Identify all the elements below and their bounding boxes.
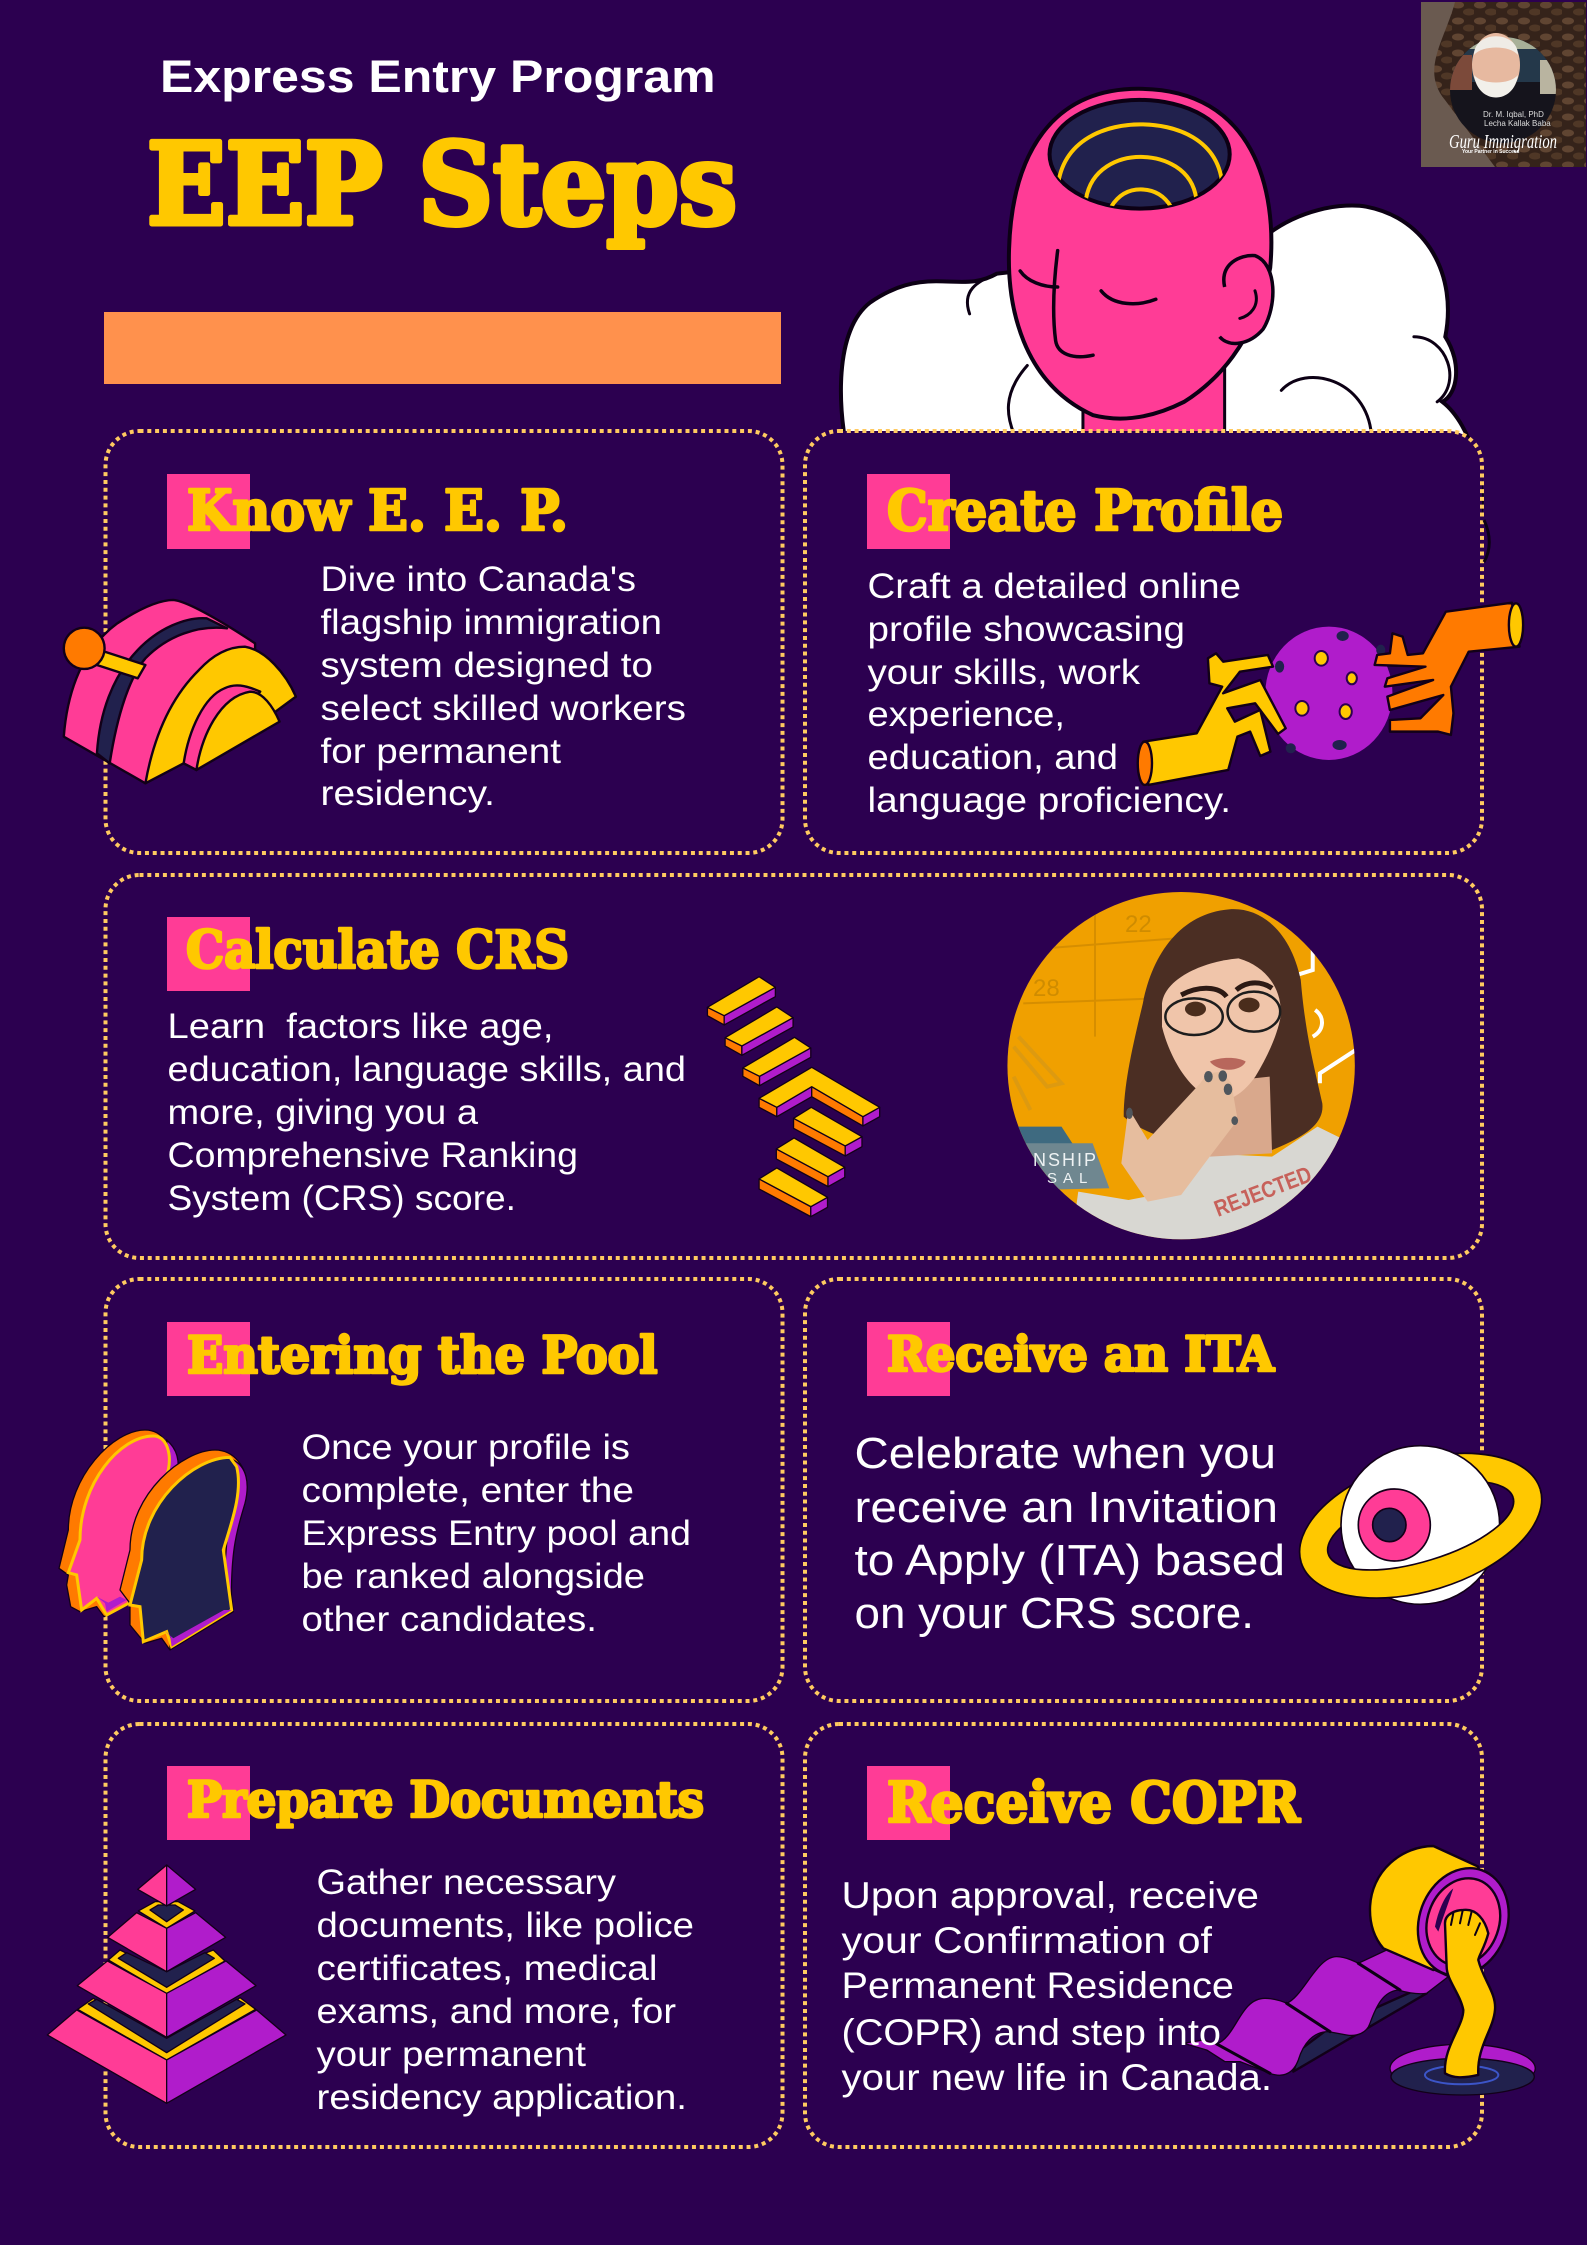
photo: Guru Immigration logo: [1421, 2, 1586, 167]
body text: Dive into Canada's: [320, 560, 636, 599]
icon: hands holding planet: [1138, 603, 1523, 785]
photo: worried woman with rejected stamp: 22: [1125, 911, 1152, 938]
highlight square: [167, 917, 250, 991]
body text: [302, 1428, 691, 1639]
body text: profile showcasing: [868, 610, 1185, 649]
body text: receive an Invitation: [854, 1483, 1278, 1532]
title: EEP Steps: EEP Steps: [147, 118, 737, 251]
body text: Upon approval, receive: [842, 1875, 1259, 1916]
body text: (COPR) and step into: [842, 2012, 1221, 2053]
body text: Celebrate when you: [854, 1429, 1276, 1478]
body text: your Confirmation of: [842, 1920, 1213, 1961]
heading: Receive an ITA: [887, 1325, 1275, 1383]
body text: Express Entry pool and: [302, 1514, 691, 1553]
body text: your skills, work: [868, 653, 1141, 692]
photo: worried woman with rejected stamp: NSHIP: [1033, 1150, 1098, 1170]
body text: complete, enter the: [302, 1471, 634, 1510]
icon: layered pyramid: [47, 1865, 286, 2103]
cloud edge: [1484, 520, 1489, 562]
highlight square: [867, 1766, 950, 1840]
body text: [168, 1007, 686, 1218]
body text: Gather necessary: [316, 1863, 617, 1902]
heading: Prepare Documents: [187, 1770, 704, 1829]
body text: System (CRS) score.: [168, 1179, 516, 1218]
body text: [320, 560, 686, 813]
body text: Comprehensive Ranking: [168, 1136, 578, 1175]
orange banner: [104, 312, 781, 384]
body text: residency.: [320, 774, 495, 813]
body text: to Apply (ITA) based: [854, 1536, 1285, 1585]
heading: Know E. E. P.: [187, 478, 568, 544]
highlight square: [867, 1322, 950, 1396]
icon: isometric stairs: [707, 977, 880, 1217]
body text: select skilled workers: [320, 689, 686, 728]
body text: certificates, medical: [316, 1949, 658, 1988]
body text: exams, and more, for: [316, 1992, 676, 2031]
body text: [854, 1429, 1285, 1638]
body text: documents, like police: [316, 1906, 694, 1945]
panel: Calculate CRS: [106, 875, 1482, 1258]
body text: Permanent Residence: [842, 1965, 1234, 2006]
body text: your new life in Canada.: [842, 2057, 1272, 2098]
highlight square: [167, 474, 250, 549]
icon: two isometric heads: [59, 1430, 247, 1650]
panel: Prepare Documents: [47, 1724, 782, 2147]
body text: your permanent: [316, 2035, 586, 2074]
photo: worried woman with rejected stamp: SAL: [1047, 1170, 1093, 1187]
heading: Calculate CRS: [186, 920, 569, 981]
illustration: head in clouds: [841, 89, 1482, 536]
panel: Receive an ITA: [805, 1279, 1559, 1701]
title: Express Entry Program: Express Entry Program: [160, 51, 716, 102]
body text: Craft a detailed online: [868, 567, 1241, 606]
body text: residency application.: [316, 2078, 687, 2117]
panel: Receive COPR: [805, 1724, 1535, 2147]
icon: isometric arches: [64, 600, 296, 783]
photo: worried woman with rejected stamp: REJECTED: [1210, 1161, 1315, 1222]
body text: Once your profile is: [302, 1428, 630, 1467]
heading: Receive COPR: [887, 1770, 1301, 1836]
body text: be ranked alongside: [302, 1557, 645, 1596]
photo: worried woman with rejected stamp: 28: [1033, 975, 1060, 1002]
heading: Create Profile: [887, 478, 1283, 544]
body text: [842, 1875, 1272, 2098]
body text: education, and: [868, 738, 1118, 777]
panel: Create Profile: [805, 431, 1523, 853]
highlight square: [167, 1322, 250, 1396]
body text: language proficiency.: [868, 781, 1231, 820]
icon: ribbon roll and hand: [1183, 1846, 1535, 2095]
photo: Guru Immigration logo: Lecha Kallak Baba: [1484, 119, 1551, 128]
body text: education, language skills, and: [168, 1050, 686, 1089]
body text: for permanent: [320, 732, 561, 771]
photo: worried woman with rejected stamp: [1004, 890, 1358, 1243]
highlight square: [167, 1766, 250, 1840]
body text: [316, 1863, 694, 2117]
panel: Entering the Pool: [59, 1279, 783, 1701]
photo: Guru Immigration logo: Your Partner in Success: [1462, 149, 1520, 155]
body text: [868, 567, 1241, 820]
body text: other candidates.: [302, 1600, 597, 1639]
heading: Entering the Pool: [187, 1326, 658, 1386]
icon: eye planet with ring: [1298, 1444, 1543, 1606]
body text: more, giving you a: [168, 1093, 479, 1132]
body text: experience,: [868, 695, 1065, 734]
panel: Know E. E. P.: [64, 431, 782, 853]
body text: flagship immigration: [320, 603, 662, 642]
body text: on your CRS score.: [854, 1589, 1254, 1638]
body text: system designed to: [320, 646, 653, 685]
photo: Guru Immigration logo: Dr. M. Iqbal, PhD: [1483, 110, 1544, 119]
body text: Learn factors like age,: [168, 1007, 554, 1046]
highlight square: [867, 474, 950, 549]
